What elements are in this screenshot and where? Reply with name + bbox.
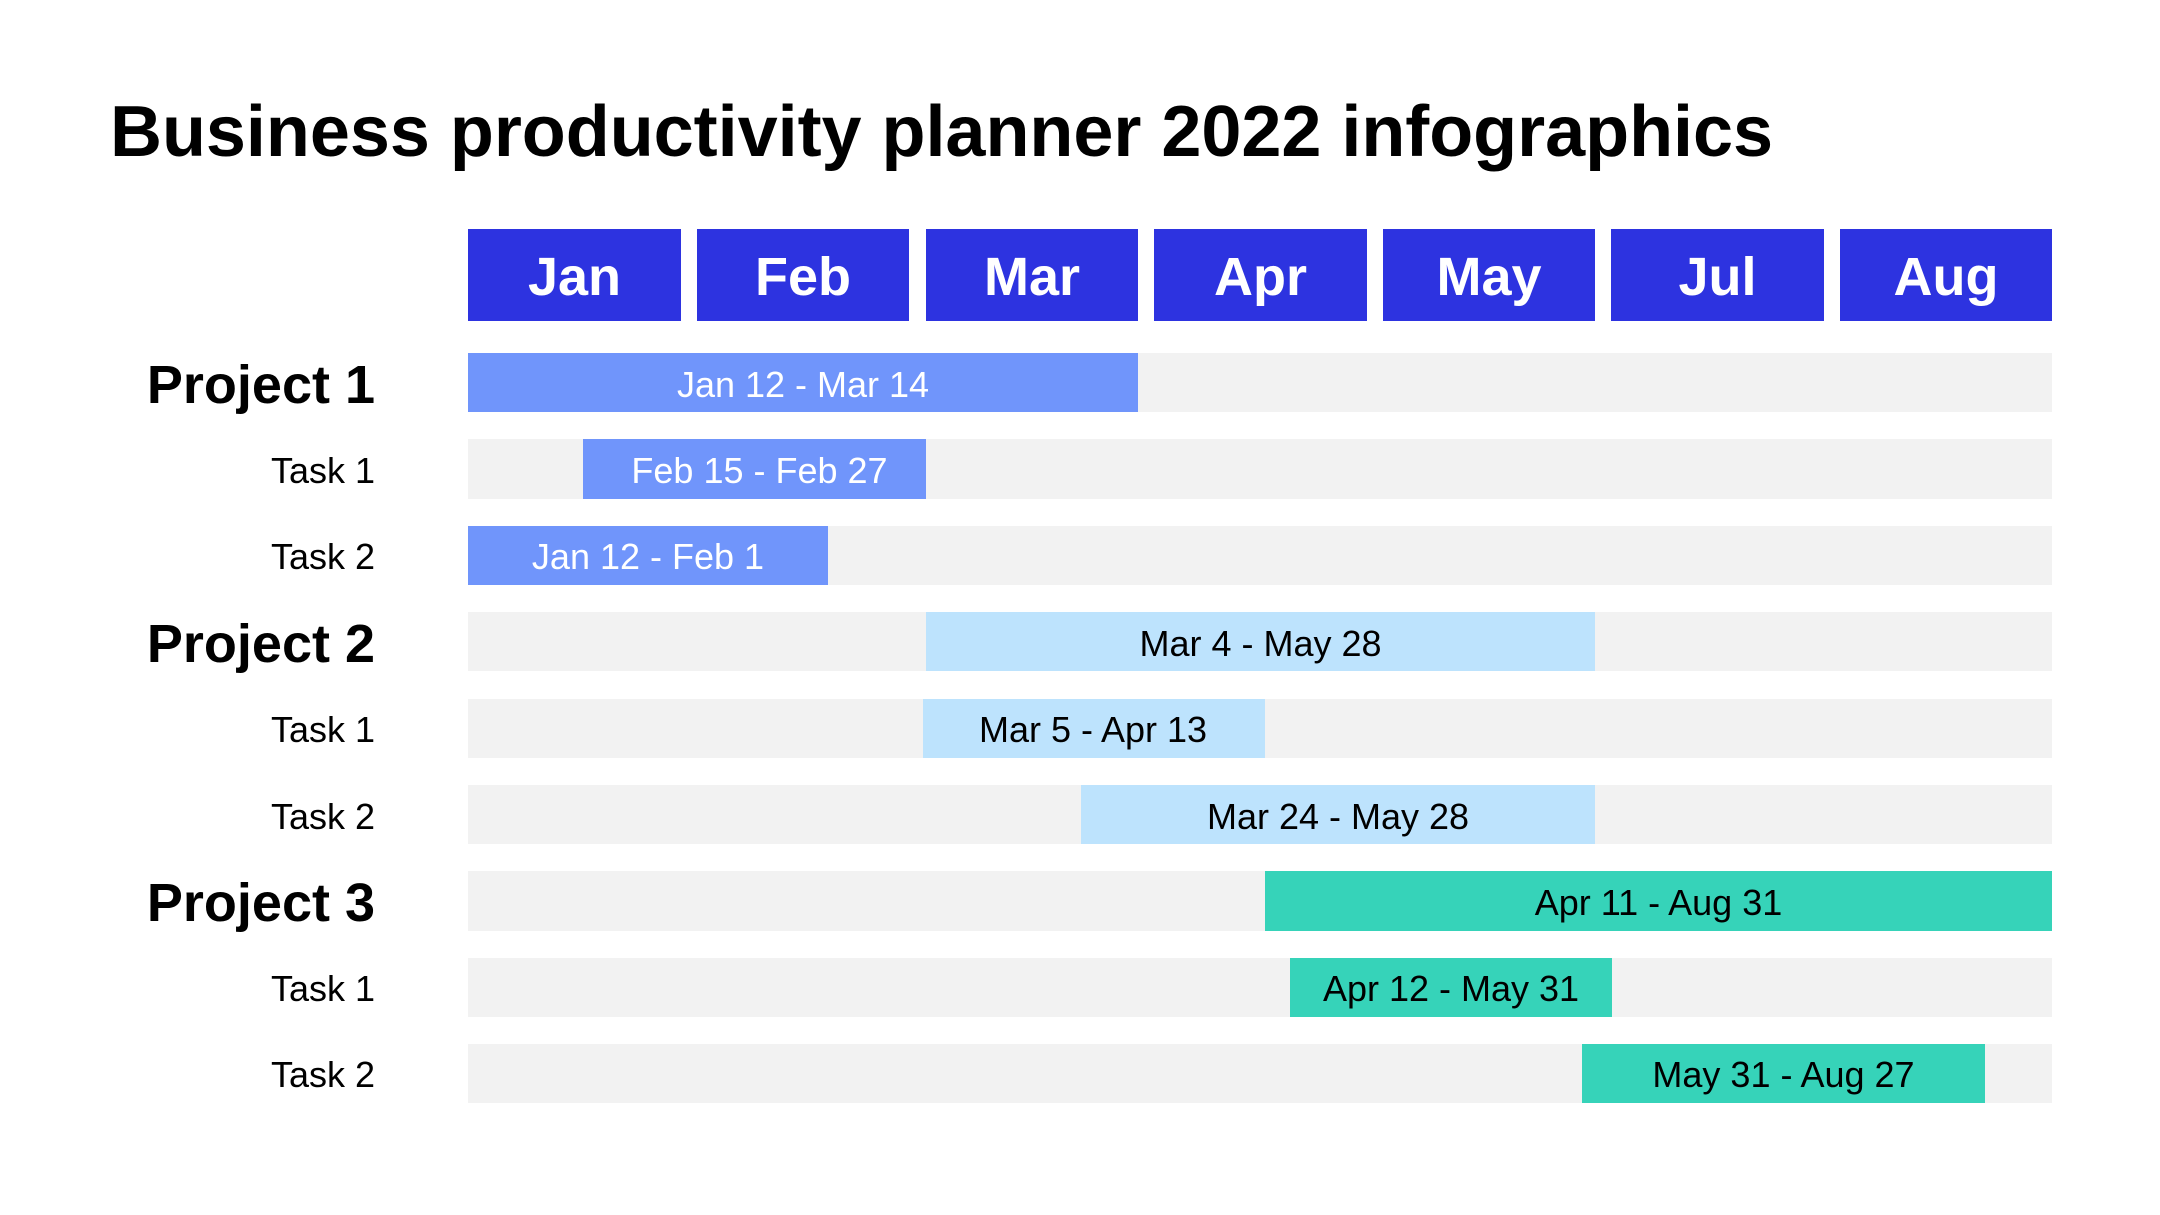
row: Project 2 timeline <box>468 612 2052 671</box>
bar: Mar 4 - May 28 <box>926 612 1595 671</box>
bar: Jan 12 - Mar 14: Jan 12 - Mar 14 <box>677 364 929 405</box>
row: Project 1 timeline <box>468 353 2052 412</box>
month: Apr <box>1154 229 1367 321</box>
bar: Mar 24 - May 28 <box>1081 785 1595 844</box>
bar: Jan 12 - Feb 1 <box>468 526 828 585</box>
month: May: May <box>1436 247 1542 307</box>
bar: Apr 12 - May 31 <box>1290 958 1612 1017</box>
bar: Mar 5 - Apr 13 <box>923 699 1265 758</box>
month: Feb: Feb <box>755 247 851 307</box>
month: Apr: Apr <box>1214 247 1307 307</box>
label: Project 3 Task 1: Task 1 <box>271 968 375 1009</box>
month: Jul <box>1611 229 1824 321</box>
bar: May 31 - Aug 27: May 31 - Aug 27 <box>1652 1054 1915 1095</box>
month: Aug: Aug <box>1894 247 1998 307</box>
row: Project 3 Task 2 timeline <box>468 1044 2052 1103</box>
bar: Feb 15 - Feb 27: Feb 15 - Feb 27 <box>631 450 888 491</box>
month: Jan <box>468 229 681 321</box>
month: Jul: Jul <box>1678 247 1757 307</box>
row: Project 1 Task 2 timeline <box>468 526 2052 585</box>
label: Project 2: Project 2 <box>147 614 375 674</box>
bar: Mar 4 - May 28: Mar 4 - May 28 <box>1139 623 1382 664</box>
row: Project 2 Task 1 timeline <box>468 699 2052 758</box>
label: Project 3 Task 2: Task 2 <box>271 1054 375 1095</box>
label: Project 2 Task 1: Task 1 <box>271 709 375 750</box>
row: Project 3 Task 1 timeline <box>468 958 2052 1017</box>
bar: Apr 11 - Aug 31: Apr 11 - Aug 31 <box>1535 882 1782 923</box>
bar: Jan 12 - Mar 14 <box>468 353 1138 412</box>
month header row <box>468 229 2052 321</box>
label: Project 3: Project 3 <box>147 873 375 933</box>
month: Feb <box>697 229 909 321</box>
label: Project 1 Task 1: Task 1 <box>271 450 375 491</box>
row: Project 3 timeline <box>468 871 2052 931</box>
month: May <box>1383 229 1595 321</box>
row: Project 1 Task 1 timeline <box>468 439 2052 499</box>
month: Aug <box>1840 229 2052 321</box>
bar: Feb 15 - Feb 27 <box>583 439 926 499</box>
bar: Apr 12 - May 31: Apr 12 - May 31 <box>1323 968 1579 1009</box>
bar: Mar 5 - Apr 13: Mar 5 - Apr 13 <box>979 709 1207 750</box>
bar: Jan 12 - Feb 1: Jan 12 - Feb 1 <box>532 536 764 577</box>
row: Project 2 Task 2 timeline <box>468 785 2052 844</box>
title: Business productivity planner 2022 infographics <box>110 92 1773 172</box>
month: Mar: Mar <box>984 247 1080 307</box>
month: Mar <box>926 229 1138 321</box>
month: Jan: Jan <box>528 247 621 307</box>
bar: Apr 11 - Aug 31 <box>1265 871 2052 931</box>
label: Project 1: Project 1 <box>147 355 375 415</box>
label: Project 2 Task 2: Task 2 <box>271 796 375 837</box>
label: Project 1 Task 2: Task 2 <box>271 536 375 577</box>
bar: May 31 - Aug 27 <box>1582 1044 1985 1103</box>
bar: Mar 24 - May 28: Mar 24 - May 28 <box>1207 796 1469 837</box>
